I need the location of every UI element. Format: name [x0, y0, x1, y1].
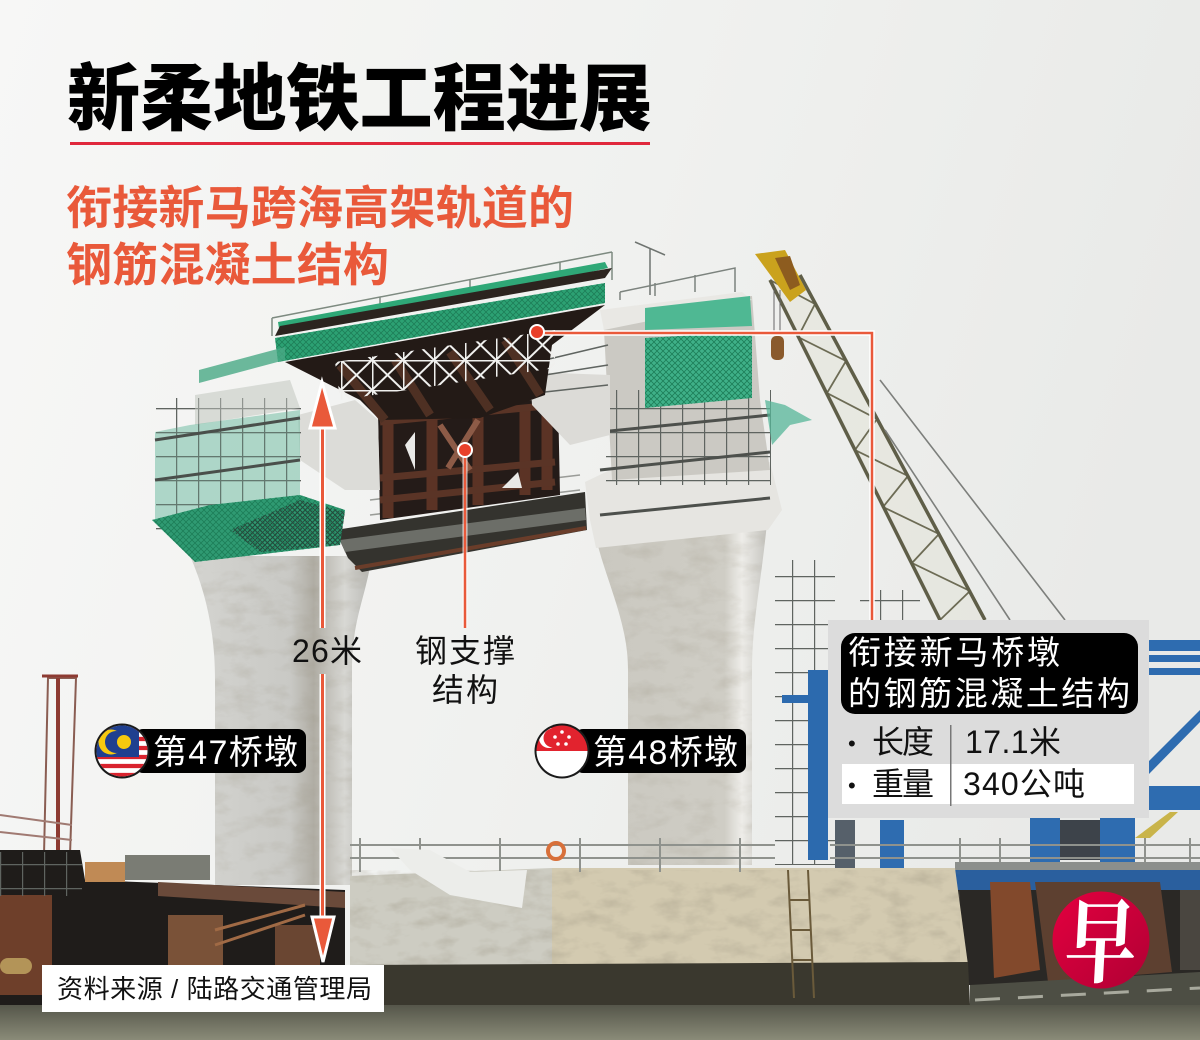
right upper scaffolding and green net [600, 268, 812, 515]
concrete grain on right pier [612, 536, 764, 865]
source note: 资料来源 / 陆路交通管理局 [57, 974, 372, 1004]
pier label: no. 47 Malaysia: 第47桥墩 [153, 734, 298, 772]
small antenna on deck [635, 242, 665, 295]
spec: weight: • [848, 773, 856, 798]
callout line: concrete structure [529, 324, 872, 620]
upper deck underside [285, 305, 605, 420]
steel girder between piers [335, 492, 587, 572]
white banner [390, 848, 527, 908]
title: 新柔地铁工程进展 [67, 59, 652, 140]
foundation left side, lighter concrete [350, 868, 552, 965]
left pier no. 47 [190, 556, 372, 885]
girder railing [370, 475, 580, 515]
left scaffolding with green net [152, 380, 345, 562]
pier label: no. 48 Singapore: 第48桥墩 [593, 734, 738, 772]
source note [42, 965, 384, 1012]
ladder on foundation [788, 870, 814, 998]
label: steel support structure: 结构 [432, 672, 498, 708]
right blue gantry structure [830, 640, 1200, 868]
foundation stains [350, 870, 960, 965]
right pier head [585, 462, 782, 548]
label: steel support structure [415, 633, 515, 708]
callout line: steel support [457, 442, 473, 628]
logo: Zaobao: 早 [1062, 869, 1141, 1002]
spec: length: 长度 [872, 724, 934, 760]
spec: length: • [848, 731, 856, 756]
white steel truss [335, 330, 555, 400]
info panel: concrete structure spec [828, 620, 1149, 818]
brown beams under deck [340, 340, 540, 420]
spec: length [848, 724, 1061, 760]
water [0, 972, 1200, 1040]
right scaffold tower [775, 560, 920, 865]
brown steel support structure [378, 398, 560, 520]
right upper concrete column [603, 296, 770, 480]
tower crane truss [755, 250, 1065, 620]
panel heading [841, 633, 1138, 714]
concrete grain on left pier [202, 556, 366, 885]
subtitle: 衔接新马跨海高架轨道的 [66, 182, 574, 234]
flag: Malaysia [96, 725, 148, 777]
dark tide band [350, 962, 970, 1007]
subtitle [66, 182, 574, 291]
concrete block under deck, right [530, 372, 610, 445]
pier label: no. 47 Malaysia [94, 724, 306, 778]
life ring on railing [548, 843, 564, 859]
right jetty [955, 862, 1200, 985]
label: height: 26米 [292, 633, 362, 669]
spec: weight: 重量 [872, 766, 934, 802]
subtitle: 钢筋混凝土结构 [66, 239, 389, 291]
deck railing [350, 838, 775, 872]
spec: length: 17.1米 [965, 724, 1061, 760]
left rusty jetty [0, 850, 345, 1005]
spec: weight [848, 766, 1085, 802]
green net on deck edge [199, 252, 612, 383]
flag: Singapore [536, 725, 588, 777]
panel heading: 的钢筋混凝土结构 [848, 675, 1130, 712]
label: steel support structure: 钢支撑 [415, 633, 515, 669]
height arrow: 26 metres [310, 382, 335, 962]
small railing on right concrete block [545, 345, 608, 392]
title underline [70, 142, 650, 145]
left lighting tower [0, 676, 78, 855]
panel heading: 衔接新马桥墩 [848, 634, 1060, 671]
pier label: no. 48 Singapore [534, 724, 746, 778]
concrete foundation block [552, 868, 968, 965]
right upper slab [600, 292, 752, 330]
row highlight [842, 764, 1134, 804]
right pier no. 48 [594, 512, 768, 865]
concrete block under deck, left [298, 400, 380, 490]
spec: weight: 340公吨 [963, 766, 1085, 802]
